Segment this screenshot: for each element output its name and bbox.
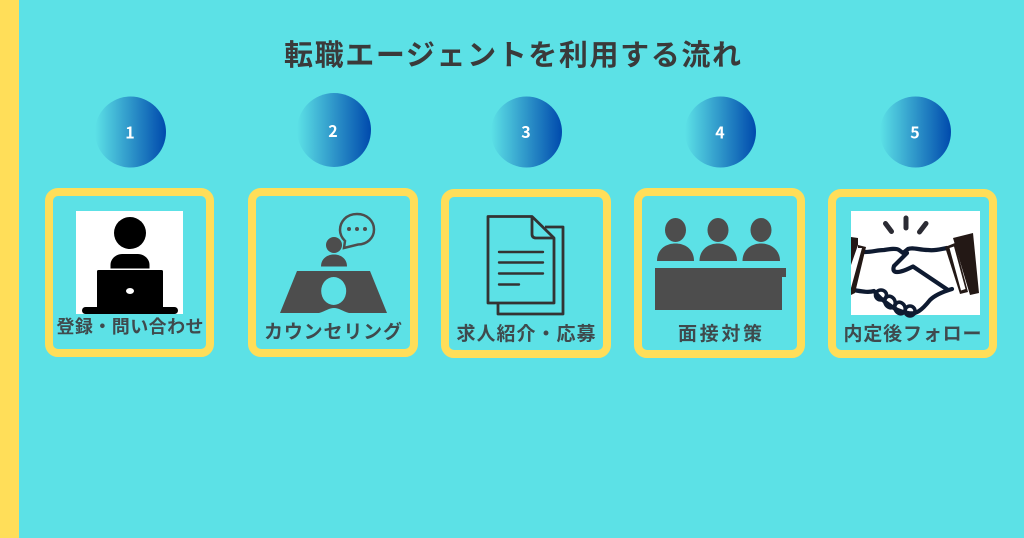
step number 3: 3 [521,119,531,143]
step number 1 [95,96,166,168]
left accent bar [0,0,19,538]
icon: documents [488,216,563,314]
panel: registration [49,192,210,353]
icon: counselor and client [280,214,387,313]
icon: interview panel [655,218,786,310]
icon: handshake [851,211,980,316]
step number 5: 5 [910,120,920,144]
panel: job introduction [445,193,607,354]
step number 5 [880,96,951,168]
title: 転職エージェントを利用する流れ [284,32,741,74]
step number 3 [491,96,562,168]
label: registration: 登録・問い合わせ [56,313,204,339]
label: job introduction: 求人紹介・応募 [456,319,596,346]
icon: person at laptop [76,211,183,314]
step number 2: 2 [328,118,338,142]
step number 2 [297,93,371,167]
step number 4 [685,96,756,168]
step number 4: 4 [715,120,725,144]
panel: post-offer follow-up [832,193,993,354]
label: counseling: カウンセリング [264,317,402,344]
label: interview preparation: 面接対策 [678,319,762,346]
panel: interview preparation [638,192,801,354]
step number 1: 1 [125,120,135,144]
panel: counseling [252,192,414,353]
label: post-offer follow-up: 内定後フォロー [844,319,982,346]
